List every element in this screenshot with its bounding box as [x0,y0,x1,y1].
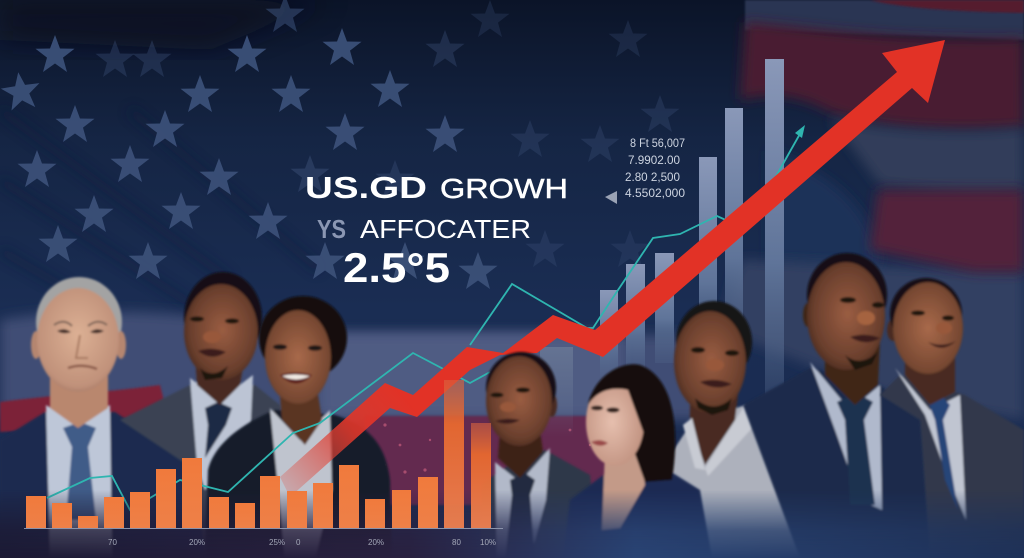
person: woman with dark hair [563,364,712,558]
person: smiling woman [205,296,392,558]
title: line two: AFFOCATER [360,214,531,244]
title: line one: US.GD [305,170,427,205]
person: man in grey suit [120,272,285,558]
trend line: teal lower [47,353,490,510]
figures list: 8 Ft 56,007 [630,136,685,150]
trend line: teal upper [470,125,805,345]
bar chart axis labels: 80 [452,538,461,547]
bar chart axis labels: 70 [108,538,117,547]
person: man in dark suit [480,352,600,558]
chart: blue-grey rising bars [540,59,784,437]
title: line two: YS [317,214,346,244]
title: line one [305,170,568,205]
person: tall man in navy suit [743,253,930,558]
figures list: 4.5502,000 [625,186,685,200]
icon: small left triangle [605,191,617,204]
figures list [625,136,685,200]
bottom fade [0,490,1024,558]
title: headline figure: 2.5°5 [343,244,450,291]
bar chart axis labels: 20% [189,538,205,547]
bar chart axis labels: 20% [368,538,384,547]
figures list: 7.9902.00 [628,153,680,167]
title: line one: GROWH [440,173,568,204]
bar chart axis labels: 10% [480,538,496,547]
bar chart axis labels [108,538,496,547]
person: white shirt man [667,301,825,558]
growth arrow: red [280,40,945,497]
person: grey-haired man [0,277,192,558]
person: man in grey suit, smiling [880,278,1024,558]
figures list: 2.80 2,500 [625,170,680,184]
bar chart axis labels: 25% [269,538,285,547]
bar chart: orange [24,380,503,528]
bar chart axis labels: 0 [296,538,301,547]
background stars [0,0,679,289]
